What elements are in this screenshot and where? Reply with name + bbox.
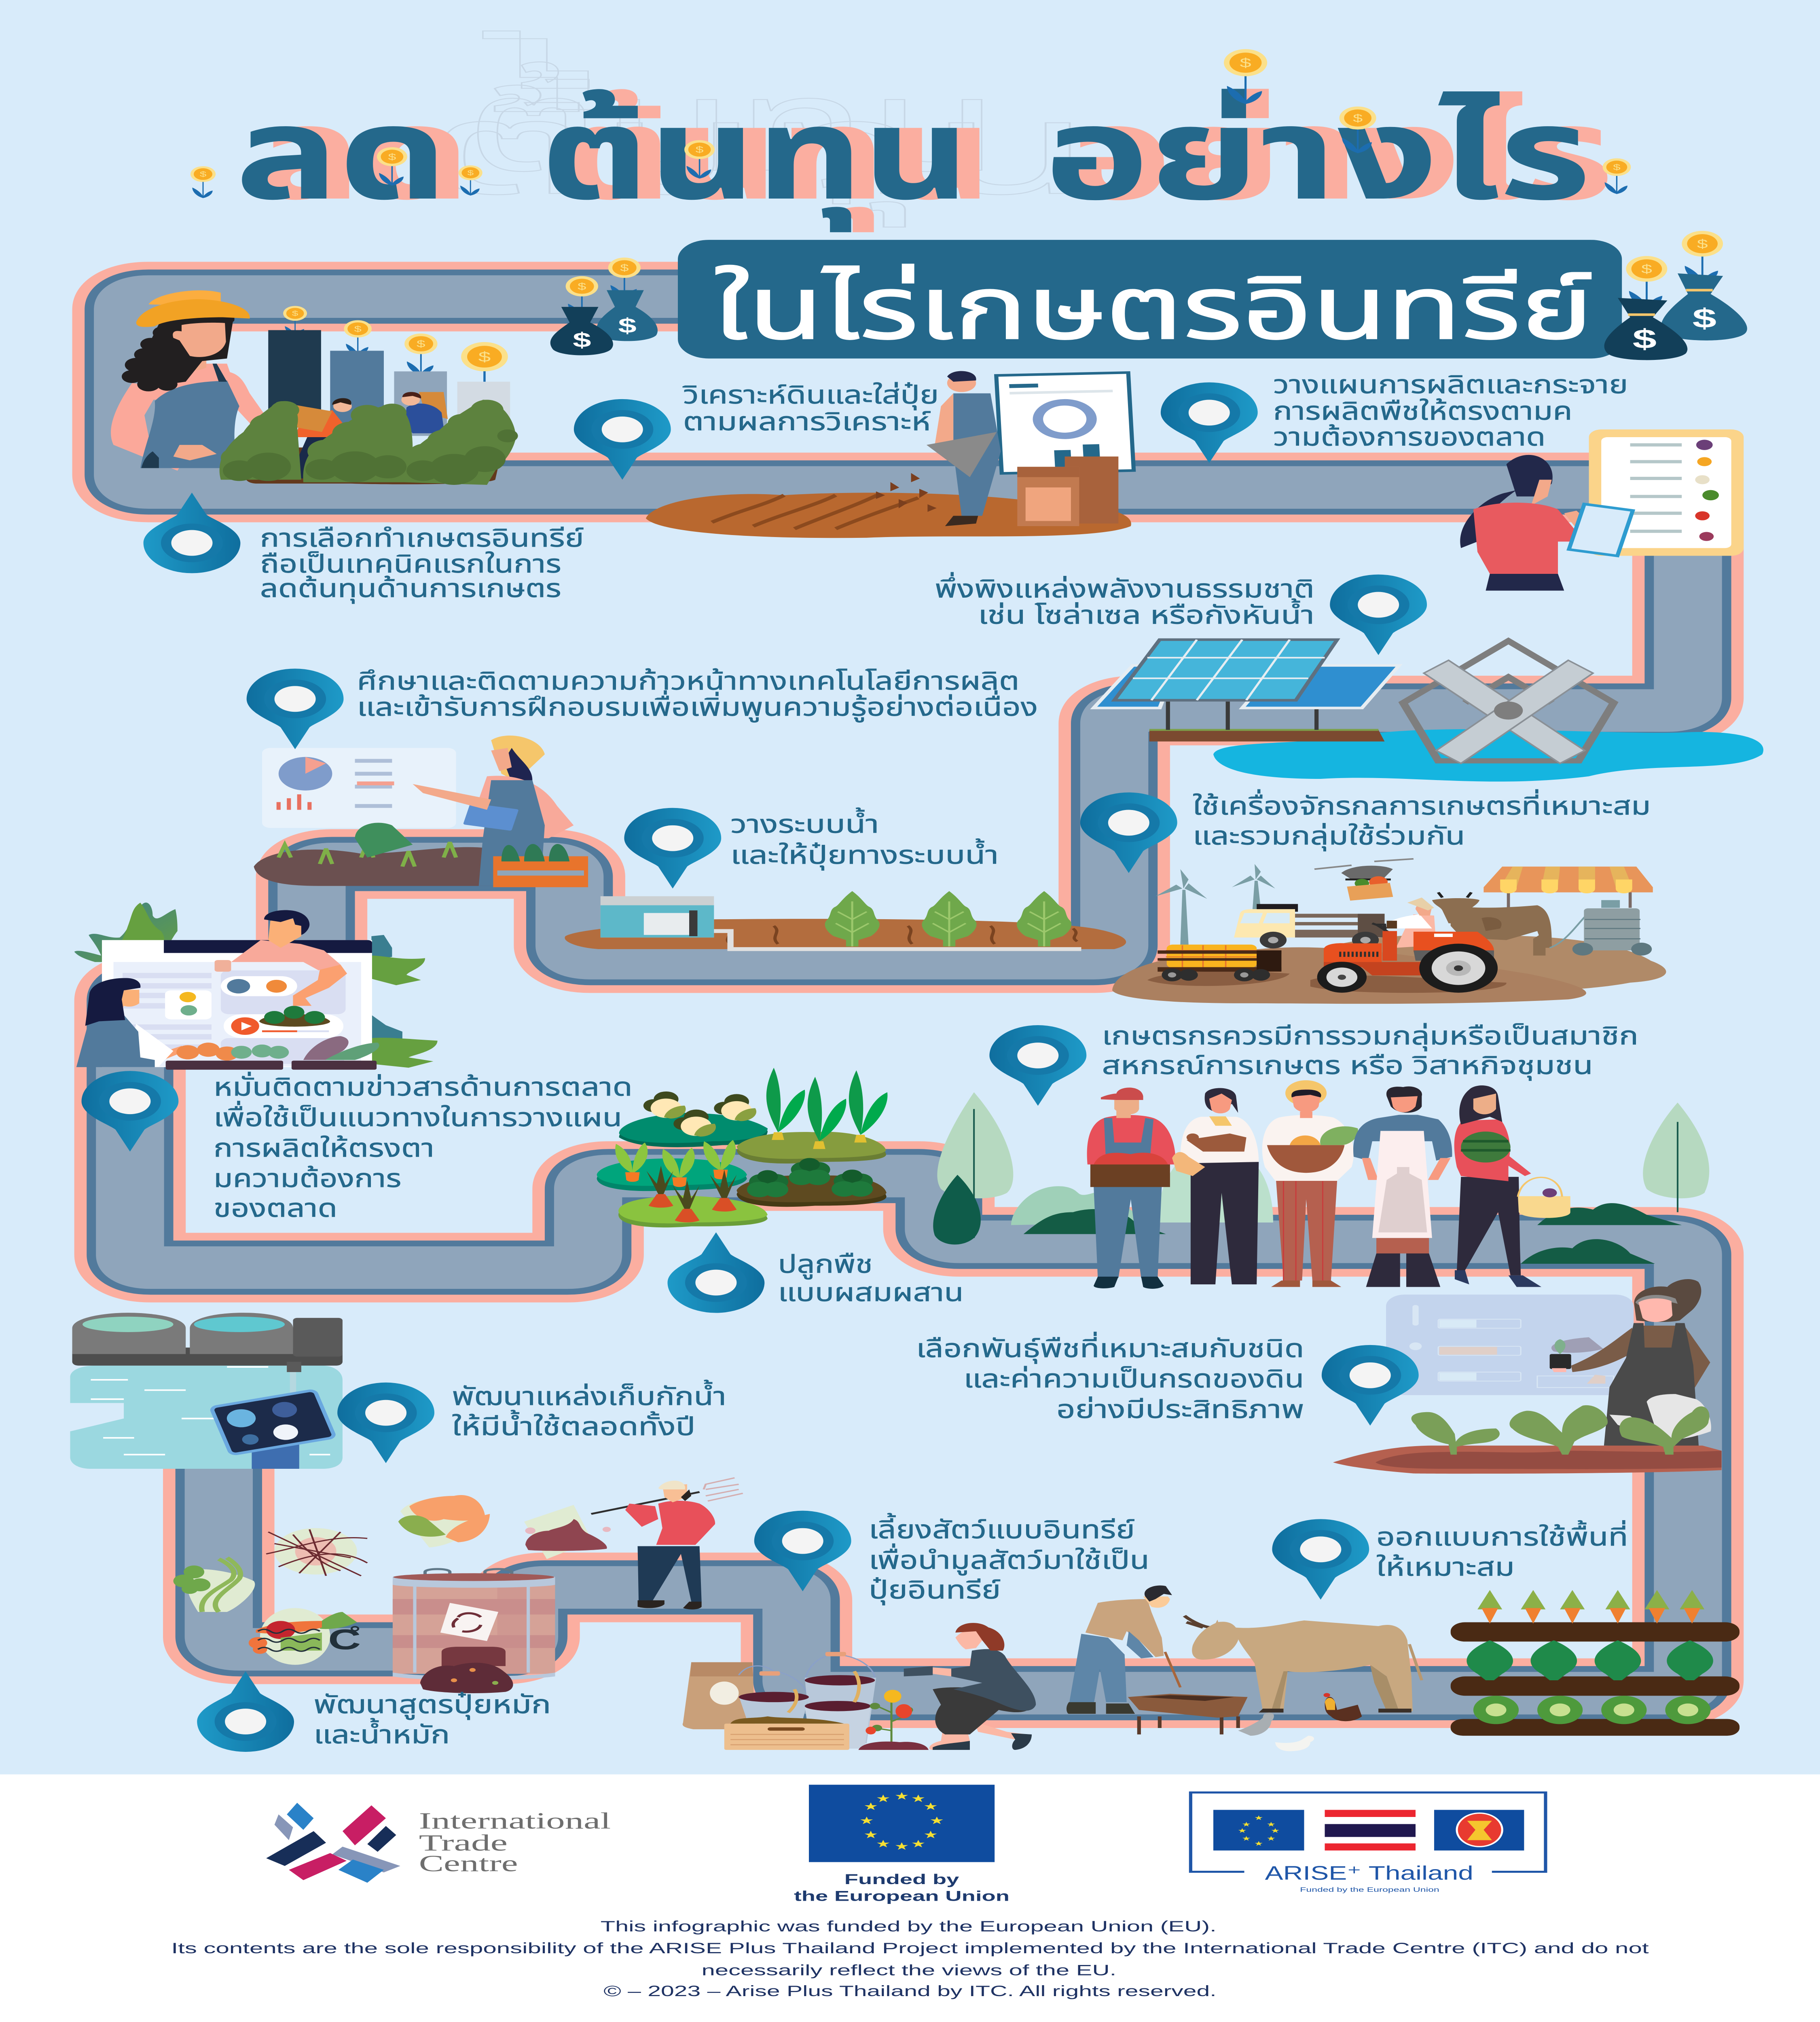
logo: EU funding flag: ★ — [864, 1830, 878, 1840]
three tea bushes — [220, 400, 518, 485]
red tractor — [1317, 923, 1498, 993]
disclaimer text: Its contents are the sole responsibility of the ARISE Plus Thailand Project implemented by the International Trade Centre (ITC) and do not — [171, 1940, 1649, 1956]
text: machinery — [1193, 789, 1651, 851]
carrots row — [1451, 1590, 1740, 1641]
scene: compost ingredients and bin — [174, 1495, 611, 1693]
text: natural energy: พึ่งพิงแหล่งพลังงานธรรมชาติ — [935, 572, 1314, 603]
buckets with compost — [739, 1652, 876, 1749]
milking tank — [1550, 900, 1652, 956]
text: machinery: ใช้เครื่องจักรกลการเกษตรที่เหมาะสม — [1193, 789, 1651, 820]
logo: ARISE Plus Thailand: Funded by the European Union — [1300, 1886, 1439, 1893]
logo: EU funding flag: ★ — [860, 1816, 873, 1825]
autumn leaves — [398, 1495, 490, 1548]
lower soil — [1112, 948, 1586, 1004]
scene: solar panels and windmill in water — [1094, 640, 1763, 782]
text: farmer groups: เกษตรกรควรมีการรวมกลุ่มหรือเป็นสมาชิก — [1102, 1022, 1638, 1051]
kneeling woman — [904, 1623, 1036, 1750]
pin: organic livestock — [754, 1511, 851, 1591]
logo: ARISE Plus Thailand: ★ — [1242, 1836, 1251, 1841]
text: compost formula: พัฒนาสูตรปุ๋ยหมัก — [314, 1690, 551, 1720]
money bags left: $ — [618, 314, 637, 337]
title: ลด — [235, 82, 448, 226]
screen window — [102, 940, 372, 1067]
pin: water storage — [337, 1383, 434, 1463]
text: natural energy — [935, 572, 1314, 629]
growing data panel — [1386, 1294, 1634, 1395]
disclaimer text: This infographic was funded by the European Union (EU). — [601, 1918, 1217, 1935]
text: irrigation: และให้ปุ๋ยทางระบบน้ำ — [730, 838, 999, 870]
woman apron figure — [111, 290, 272, 471]
logo: ARISE Plus Thailand: ★ — [1271, 1828, 1279, 1834]
money bags left: $ — [573, 328, 591, 351]
gardener — [1550, 1279, 1711, 1449]
faint ghost title outline: ต้นทุน — [423, 77, 1094, 228]
pin: production planning — [1161, 382, 1258, 463]
scene: vegetable rows — [1451, 1590, 1740, 1736]
man leaning over screen — [215, 910, 347, 1006]
title: ต้นทุน — [563, 82, 993, 233]
text: farmer groups: สหกรณ์การเกษตร หรือ วิสาหกิจชุมชน — [1102, 1051, 1593, 1081]
pin: farmer groups — [989, 1025, 1086, 1106]
farmer with milk can — [1353, 1086, 1452, 1287]
text: seed selection — [916, 1332, 1304, 1423]
logo: EU funding flag: ★ — [864, 1802, 878, 1811]
text: water storage: พัฒนาแหล่งเก็บกักน้ำ — [452, 1380, 726, 1411]
title: ต้นทุน — [541, 82, 970, 233]
text: seed selection: อย่างมีประสิทธิภาพ — [1056, 1395, 1304, 1423]
disclaimer text: necessarily reflect the views of the EU. — [702, 1962, 1116, 1979]
manure card with flies — [524, 1505, 611, 1559]
footer background — [0, 1775, 1820, 2022]
text: compost formula: และน้ำหมัก — [314, 1718, 450, 1749]
pin: land design — [1272, 1519, 1369, 1600]
scene: woman with growth chart and bushes — [111, 290, 518, 485]
logo: EU funding flag: ★ — [876, 1839, 890, 1849]
picker in orange — [289, 398, 363, 478]
faint ghost title outline: ต้นทุน — [464, 54, 1001, 205]
logo: ARISE Plus Thailand: ★ — [1238, 1828, 1246, 1834]
fibrous roots — [266, 1528, 367, 1576]
text: market information: เพื่อใช้เป็นแนวทางในการวางแผน — [214, 1101, 622, 1132]
logo: EU funding flag: ★ — [930, 1816, 944, 1825]
pin: soil analysis — [574, 399, 671, 480]
seedlings — [1412, 1405, 1710, 1455]
scene: farm machinery, truck, cow, drone — [1112, 859, 1666, 1004]
text: market information: มความต้องการ — [214, 1164, 401, 1193]
logo: ARISE Plus Thailand — [1191, 1792, 1545, 1893]
text: irrigation: วางระบบน้ำ — [730, 807, 879, 838]
text: compost formula — [314, 1690, 551, 1749]
text: choose organic farming: ลดต้นทุนด้านการเกษตร — [260, 574, 561, 604]
farmer with hen — [1172, 1088, 1259, 1284]
text: market information: การผลิตให้ตรงตา — [214, 1134, 434, 1162]
text: technology and training — [357, 667, 1038, 722]
scene: man feeding cow with chickens and ducks — [1067, 1586, 1422, 1751]
pin: seed selection — [1322, 1345, 1419, 1426]
text: choose organic farming: ถือเป็นเทคนิคแรกในการ — [260, 550, 561, 578]
text: market information: หมั่นติดตามข่าวสารด้านการตลาด — [214, 1072, 633, 1101]
pin: technology and training — [247, 668, 343, 749]
vegetable crates — [166, 1036, 379, 1070]
compost bag — [683, 1662, 755, 1729]
farmer with basket of vegetables — [1262, 1080, 1358, 1287]
cabbage mound — [736, 1158, 887, 1207]
tomato plant — [858, 1690, 929, 1750]
lettuce row — [1451, 1640, 1740, 1696]
scene: irrigation pump and lettuce — [565, 891, 1126, 949]
pin: choose organic farming — [144, 493, 240, 573]
text: machinery: และรวมกลุ่มใช้ร่วมกัน — [1193, 822, 1465, 851]
text: land design: ให้เหมาะสม — [1376, 1553, 1515, 1581]
cabbage row — [1451, 1696, 1740, 1736]
hat — [148, 290, 221, 307]
text: soil analysis: วิเคราะห์ดินและใส่ปุ๋ย — [682, 381, 939, 410]
grey goose — [1238, 1713, 1274, 1736]
rooster — [1323, 1693, 1362, 1721]
cauliflower mound — [619, 1091, 768, 1147]
disclaimer text — [171, 1918, 1649, 1999]
text: production planning: การผลิตพืชให้ตรงตามค — [1273, 397, 1572, 425]
logo: EU funding flag: ★ — [895, 1842, 908, 1851]
logo: ARISE Plus Thailand: ★ — [1242, 1821, 1251, 1827]
logo: ARISE Plus Thailand: ARISE⁺ Thailand — [1265, 1862, 1473, 1884]
text: farmer groups — [1102, 1022, 1638, 1081]
scene: group of five farmers — [1087, 1080, 1570, 1289]
picker in blue — [401, 392, 448, 433]
delivery drone — [1314, 859, 1414, 901]
truck — [1234, 904, 1384, 948]
compost bin — [393, 1569, 555, 1693]
pin: machinery — [1080, 792, 1177, 873]
scene: mixed crop mounds — [597, 1068, 887, 1227]
title: อย่างไร — [1067, 82, 1614, 226]
text: soil analysis: ตามผลการวิเคราะห์ — [683, 408, 931, 436]
hay wagon — [1158, 945, 1281, 981]
carrot mound — [597, 1140, 747, 1191]
farmer with watermelon — [1454, 1085, 1570, 1287]
logo: International Trade Centre: Trade — [419, 1830, 508, 1856]
title: อย่างไร — [1044, 82, 1591, 226]
text: market information: ของตลาด — [214, 1194, 337, 1222]
text: natural energy: เช่น โซล่าเซล หรือกังหันน้ำ — [978, 599, 1314, 629]
pin: market information — [82, 1071, 178, 1152]
text: water storage: ให้มีน้ำใช้ตลอดทั้งปี — [452, 1410, 695, 1441]
title coin flowers — [190, 49, 1631, 198]
text: production planning: วามต้องการของตลาด — [1273, 423, 1545, 451]
text: organic livestock: ปุ๋ยอินทรีย์ — [869, 1576, 1001, 1605]
pin: natural energy — [1330, 575, 1427, 655]
text: organic livestock: เพื่อนำมูลสัตว์มาใช้เป็น — [869, 1544, 1149, 1576]
soil under bushes — [241, 448, 503, 484]
feeding trough — [1128, 1694, 1248, 1734]
text: choose organic farming — [260, 524, 584, 604]
cow — [1432, 893, 1552, 956]
money bags right: $ — [1692, 303, 1716, 333]
wooden crate — [724, 1716, 849, 1750]
title — [235, 82, 1614, 233]
disclaimer text: © – 2023 – Arise Plus Thailand by ITC. All rights reserved. — [603, 1983, 1217, 1999]
upper soil — [1321, 934, 1666, 991]
text: organic livestock — [869, 1513, 1149, 1605]
money bags left — [550, 258, 658, 355]
curly hair — [122, 313, 235, 391]
text: market information — [214, 1072, 633, 1222]
seedling bed — [1333, 1446, 1722, 1474]
text: mixed planting: แบบผสมผสาน — [778, 1278, 964, 1307]
text: organic livestock: เลี้ยงสัตว์แบบอินทรีย์ — [869, 1513, 1135, 1544]
text: water storage — [452, 1380, 726, 1441]
text: mixed planting — [778, 1250, 964, 1307]
pin: mixed planting — [668, 1232, 764, 1313]
driver — [1387, 897, 1436, 948]
chart coins — [283, 306, 508, 401]
chart bars — [268, 330, 510, 436]
text: production planning: วางแผนการผลิตและกระจาย — [1273, 370, 1628, 399]
logo: ARISE Plus Thailand: ★ — [1267, 1821, 1275, 1827]
text: production planning — [1273, 370, 1628, 451]
logo: International Trade Centre: Centre — [419, 1851, 518, 1876]
text: mixed planting: ปลูกพืช — [778, 1250, 873, 1280]
turbines — [1155, 864, 1275, 945]
text: seed selection: และค่าความเป็นกรดของดิน — [964, 1365, 1304, 1393]
scene: online marketing screen with two people — [74, 903, 438, 1070]
logo: EU funding flag: the European Union — [794, 1888, 1009, 1904]
title: ลด — [258, 82, 470, 226]
vegetable scraps and temperature: C — [328, 1624, 361, 1655]
money bags right: $ — [1633, 324, 1657, 354]
text: technology and training: ศึกษาและติดตามความก้าวหน้าทางเทคโนโลยีการผลิต — [357, 667, 1019, 695]
woman with notebook — [76, 978, 186, 1067]
logo: EU funding flag: ★ — [895, 1791, 908, 1801]
text: technology and training: และเข้ารับการฝึกอบรมเพื่อเพิ่มพูนความรู้อย่างต่อเนื่อง — [357, 690, 1038, 722]
white duck — [1275, 1736, 1314, 1751]
subtitle box: ในไร่เกษตรอินทรีย์ — [714, 259, 1593, 357]
text: irrigation — [730, 807, 999, 870]
vegetable scraps and temperature — [249, 1608, 361, 1665]
scene: woman with seedling data panel — [1333, 1279, 1722, 1474]
logo: International Trade Centre — [266, 1803, 611, 1883]
faint ghost title outline — [423, 31, 1094, 228]
logo: ARISE Plus Thailand: ★ — [1255, 1841, 1263, 1846]
scene: woman presenting farm data — [254, 736, 588, 887]
logo: EU funding flag: ★ — [924, 1802, 938, 1811]
winding road — [128, 296, 1688, 1693]
logo: ARISE Plus Thailand: ★ — [1267, 1836, 1275, 1841]
logo: International Trade Centre: International — [419, 1808, 611, 1834]
money bags right — [1604, 231, 1747, 360]
farmer with tomato crate — [1087, 1087, 1176, 1289]
text: soil analysis — [682, 381, 939, 436]
logo: EU funding flag — [794, 1785, 1009, 1904]
market awning — [1484, 867, 1653, 908]
scene: soil analysis and fertiliser — [646, 371, 1134, 538]
logo: EU funding flag: ★ — [924, 1830, 938, 1840]
logo: EU funding flag: Funded by — [844, 1871, 959, 1887]
text: choose organic farming: การเลือกทำเกษตรอินทรีย์ — [260, 524, 584, 552]
cow — [1185, 1616, 1422, 1713]
onion mound — [736, 1068, 887, 1163]
clover and vines card — [174, 1558, 255, 1612]
logo: ARISE Plus Thailand: ★ — [1255, 1815, 1263, 1821]
logo: EU funding flag: ★ — [876, 1794, 890, 1803]
scene: farmer with pitchfork — [591, 1478, 743, 1610]
scene: compost bag, buckets and kneeling woman — [683, 1623, 1036, 1750]
scene: woman with planning clipboard — [1460, 429, 1744, 590]
scene: water tanks and pond with smart tablet — [70, 1313, 343, 1469]
pin: irrigation — [624, 808, 721, 888]
text: seed selection: เลือกพันธุ์พืชที่เหมาะสมกับชนิด — [916, 1332, 1304, 1364]
radish mound — [618, 1166, 768, 1227]
logo: EU funding flag: ★ — [912, 1839, 925, 1849]
leaves behind screen — [74, 903, 438, 1068]
text: land design: ออกแบบการใช้พื้นที่ — [1376, 1520, 1628, 1551]
man with stick — [1067, 1586, 1180, 1714]
text: land design — [1376, 1520, 1628, 1581]
scene: trees and bushes by group — [933, 1092, 1709, 1264]
pin: compost formula — [197, 1671, 294, 1752]
logo: EU funding flag: ★ — [912, 1794, 925, 1803]
